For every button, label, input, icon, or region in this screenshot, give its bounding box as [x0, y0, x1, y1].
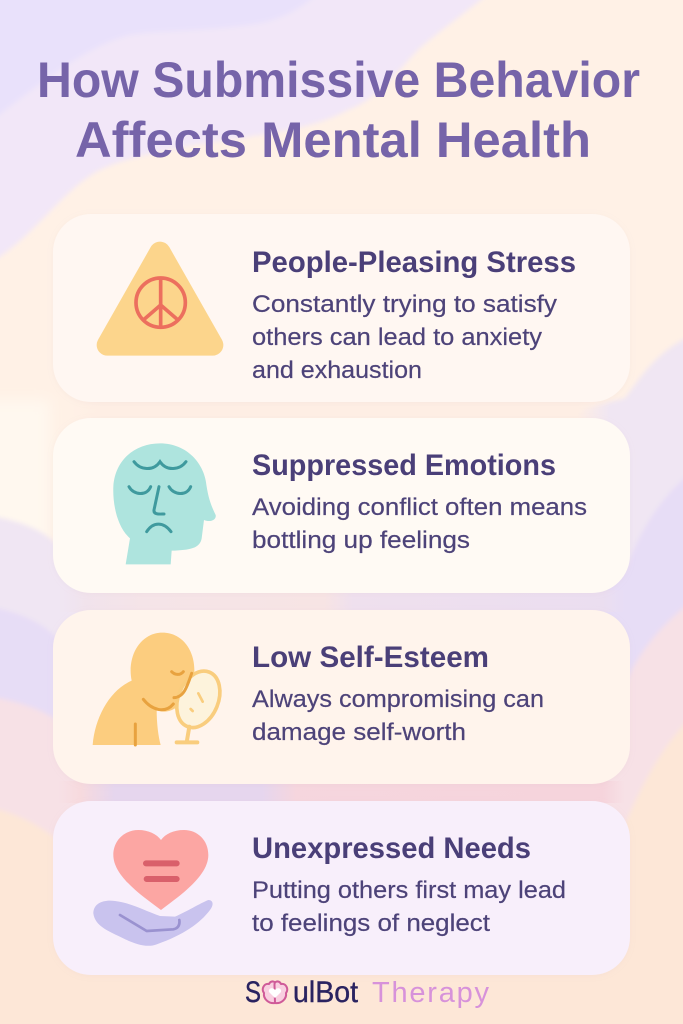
title: [37, 52, 640, 168]
heading: people-pleasing stress: People-Pleasing Stress: [252, 246, 576, 279]
text: low self-esteem description: Always compromising can: [252, 686, 544, 713]
text: people-pleasing description: [252, 291, 557, 384]
panel: people-pleasing stress: [53, 214, 630, 402]
panel: unexpressed needs: [53, 801, 630, 975]
text: suppressed emotions description: [252, 494, 587, 554]
text: people-pleasing description: others can lead to anxiety: [252, 324, 542, 351]
text: low self-esteem description: [252, 686, 544, 746]
text: unexpressed needs description: Putting others first may lead: [252, 877, 566, 904]
title: Affects Mental Health: [75, 112, 591, 168]
icon: brain heart logo mark: [263, 981, 287, 1003]
icon: heart over hand: [93, 830, 213, 946]
logo: SoulBot Therapy: [245, 976, 490, 1009]
panel: low self-esteem: [53, 610, 630, 784]
heading: low self-esteem: Low Self-Esteem: [252, 641, 489, 674]
text: unexpressed needs description: to feelings of neglect: [252, 910, 490, 937]
text: suppressed emotions description: Avoiding conflict often means: [252, 494, 587, 521]
panel: suppressed emotions: [53, 418, 630, 593]
text: people-pleasing description: Constantly trying to satisfy: [252, 291, 557, 318]
icon: person with mirror: [93, 633, 228, 745]
text: people-pleasing description: and exhaustion: [252, 357, 422, 384]
heading: suppressed emotions: Suppressed Emotions: [252, 449, 556, 482]
gap strips between cards: [70, 400, 610, 420]
heading: unexpressed needs: Unexpressed Needs: [252, 832, 531, 865]
icon: sad head: [113, 443, 216, 564]
logo: SoulBot Therapy: Therapy: [372, 977, 490, 1009]
text: unexpressed needs description: [252, 877, 566, 937]
logo: SoulBot Therapy: ulBot: [293, 976, 359, 1009]
text: suppressed emotions description: bottling up feelings: [252, 527, 470, 554]
text: low self-esteem description: damage self-worth: [252, 719, 466, 746]
logo: SoulBot Therapy: S: [245, 976, 261, 1009]
icon: triangle with peace sign: [107, 252, 213, 345]
title: How Submissive Behavior: [37, 52, 640, 108]
